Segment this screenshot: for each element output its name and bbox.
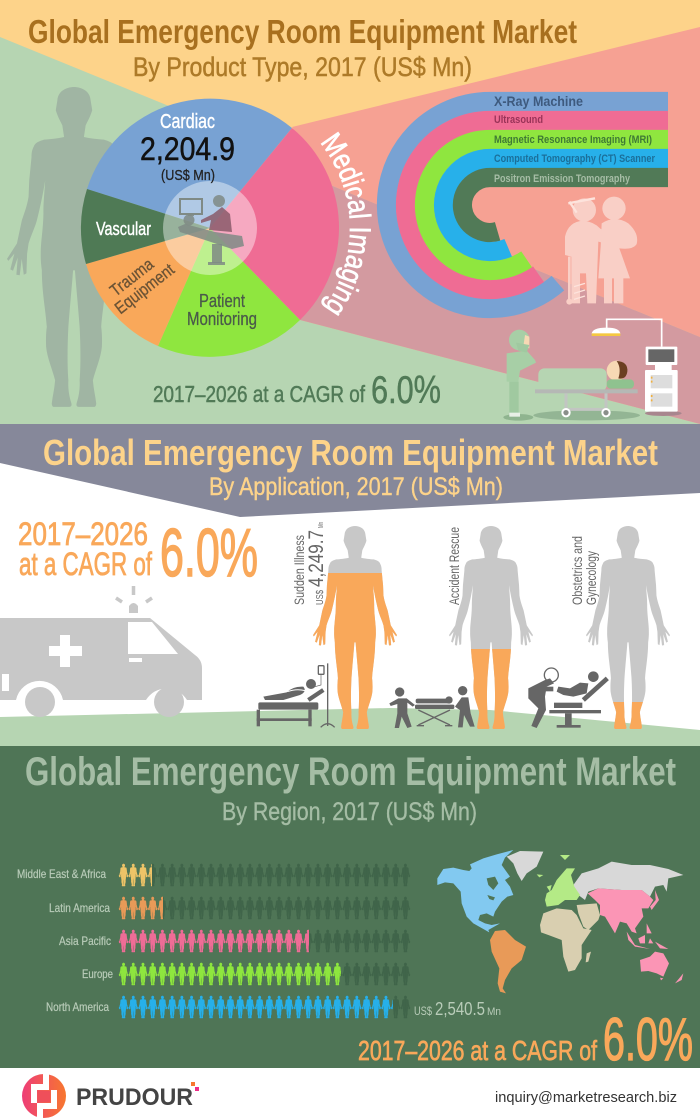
pie chart — [80, 98, 372, 357]
region labels — [17, 867, 113, 1014]
CAGR callout: 2017–2026 — [18, 516, 148, 552]
icon: patient and carer — [565, 197, 637, 305]
label: Patient Monitoring: Patient — [199, 291, 245, 311]
value: North America: US$ — [414, 1004, 432, 1018]
icon: obstetrics figure — [586, 526, 670, 729]
title: Global Emergency Room Equipment Market — [28, 13, 577, 50]
value: North America: 2,540.5 — [435, 999, 485, 1019]
value: 2,204.9: 2,204.9 — [140, 131, 235, 167]
arc labels — [494, 93, 656, 185]
unit: (US$ Mn) — [161, 167, 215, 184]
CAGR callout: 2017–2026 at a CAGR of — [358, 1035, 597, 1066]
subtitle: By Application, 2017 (US$ Mn) — [209, 473, 503, 501]
pictogram chart: North America — [119, 996, 410, 1018]
region labels: Asia Pacific — [59, 934, 111, 948]
label: Vascular: Vascular — [96, 219, 151, 239]
label: Cardiac: Cardiac — [160, 111, 215, 133]
value: North America: Mn — [487, 1006, 501, 1018]
label: Obstetrics and Gynecology — [569, 536, 599, 605]
subtitle: By Product Type, 2017 (US$ Mn) — [133, 52, 472, 82]
arc labels: Magnetic Resonance Imaging (MRI) — [494, 134, 652, 146]
pie chart: Medical Imaging — [320, 132, 372, 316]
label: Obstetrics and Gynecology: Gynecology — [583, 551, 599, 605]
panel: by product type — [0, 0, 700, 424]
value: 4,249.7: US$ — [315, 590, 326, 605]
arc labels: X-Ray Machine — [494, 93, 583, 109]
CAGR callout — [18, 515, 258, 591]
region labels: Middle East & Africa — [17, 867, 106, 881]
pictogram chart: Asia Pacific — [119, 930, 410, 952]
world map — [437, 850, 683, 993]
icon: accident rescue figure — [449, 526, 533, 729]
pictogram chart: Middle East and Africa — [119, 864, 410, 886]
label: Obstetrics and Gynecology: Obstetrics and — [569, 536, 585, 605]
footer — [22, 1074, 677, 1118]
label: Trauma Equipment: Trauma — [106, 254, 158, 300]
logo mark — [22, 1074, 66, 1118]
pictogram chart: Latin America — [119, 897, 410, 919]
icon: gynecology chair — [528, 668, 607, 728]
logo accent — [191, 1082, 199, 1091]
icon: doctor with patient on bed and monitor — [503, 319, 682, 421]
icon: hospital bed with IV — [257, 663, 335, 727]
CAGR callout: 6.0% — [371, 369, 441, 412]
region labels: Latin America — [49, 901, 110, 915]
arc labels: Ultrasound — [494, 114, 543, 126]
panel: by region — [0, 746, 700, 1073]
label: Patient Monitoring: Monitoring — [187, 309, 257, 329]
arc labels: Computed Tomography (CT) Scanner — [494, 153, 656, 165]
label: Patient Monitoring — [187, 291, 257, 329]
CAGR callout — [153, 369, 441, 412]
CAGR callout: 2017–2026 at a CAGR of — [153, 381, 365, 407]
value: 4,249.7: 4,249.7 — [305, 530, 328, 587]
subtitle: By Region, 2017 (US$ Mn) — [222, 798, 477, 826]
CAGR callout — [358, 1006, 693, 1073]
chart: concentric imaging arcs — [386, 102, 668, 309]
logo wordmark: PRUDOUR — [76, 1084, 193, 1111]
icon: human silhouette — [7, 87, 141, 407]
region labels: Europe — [82, 967, 113, 981]
CAGR callout: 6.0% — [160, 515, 258, 591]
icon: ambulance — [0, 586, 202, 717]
icon: operating table — [178, 195, 244, 265]
panel: by application — [0, 424, 700, 747]
icon: rescuers with stretcher — [389, 686, 475, 728]
contact email: inquiry@marketresearch.biz — [495, 1089, 677, 1106]
region labels: North America — [46, 1000, 109, 1014]
label: Sudden Illness: Sudden Illness — [291, 535, 307, 605]
value: North America — [414, 999, 501, 1019]
label: Trauma Equipment: Equipment — [111, 260, 178, 318]
pictogram chart: Europe — [119, 963, 410, 985]
value: 4,249.7: Mn — [318, 522, 325, 528]
CAGR callout: at a CAGR of — [19, 546, 152, 582]
icon: sudden illness figure — [313, 526, 397, 729]
label: Accident Rescue: Accident Rescue — [446, 527, 462, 605]
arc labels: Positron Emission Tomography — [494, 173, 631, 185]
label: Medical Imaging — [320, 142, 350, 308]
